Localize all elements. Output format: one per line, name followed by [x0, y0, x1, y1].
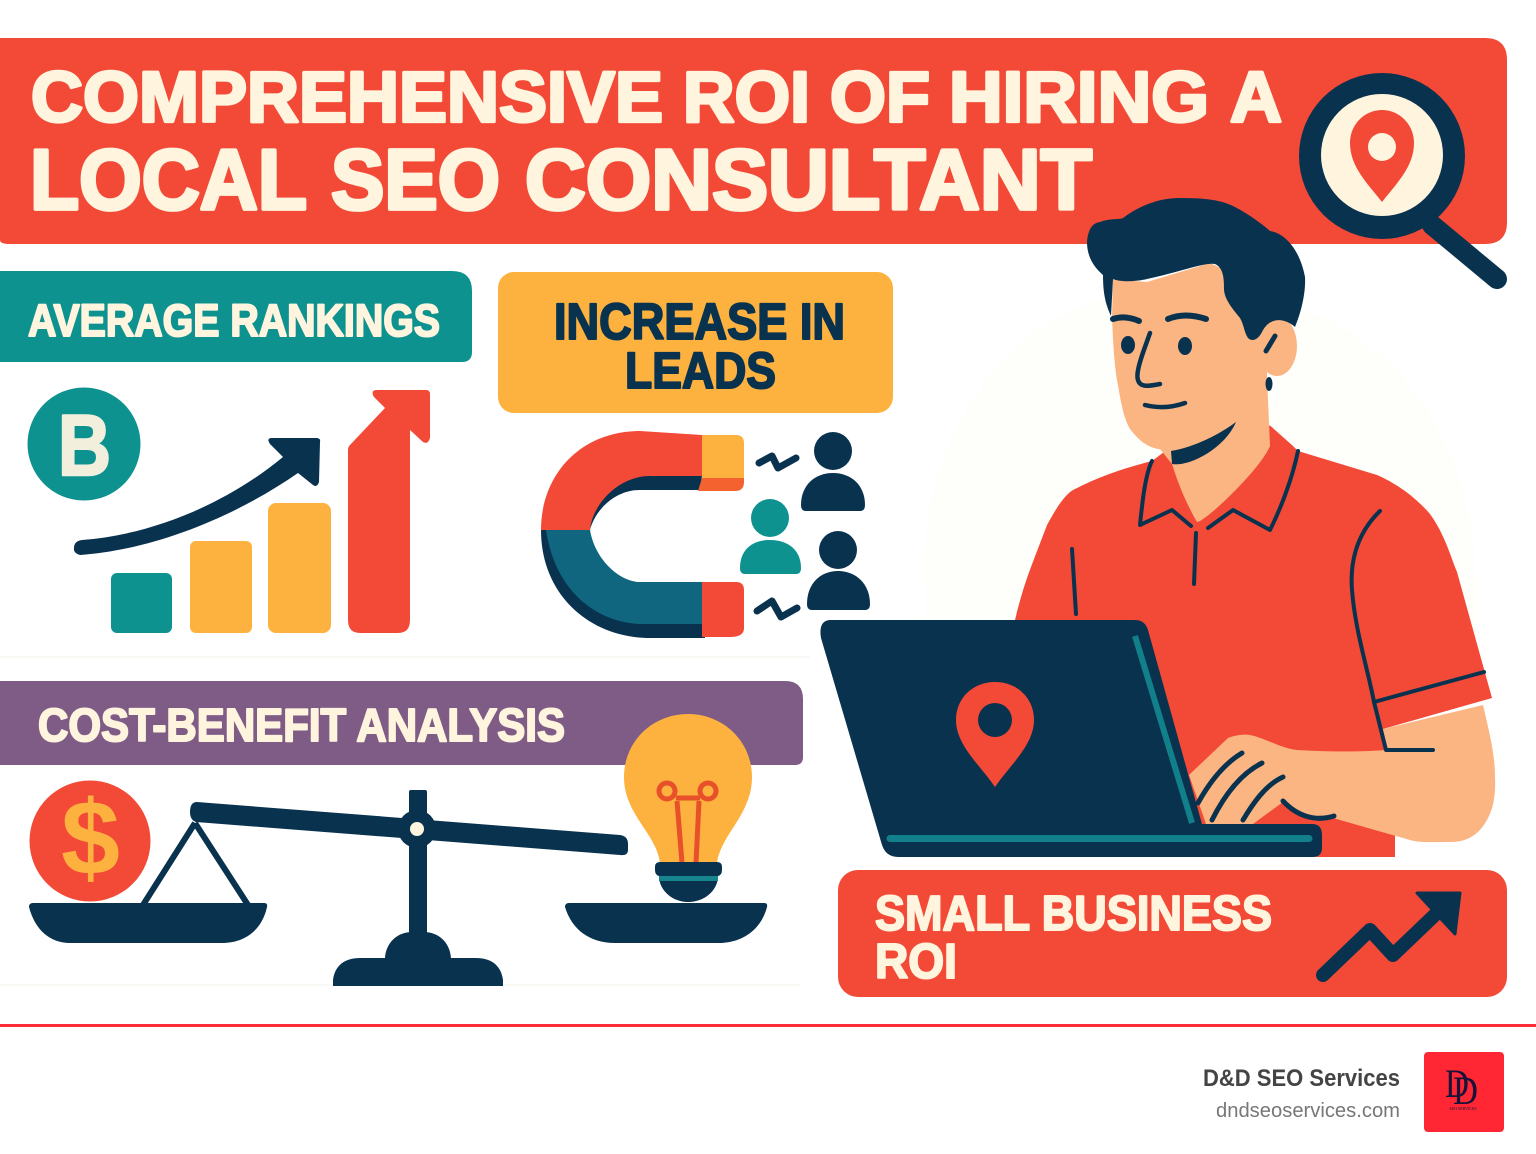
brand website: dndseoservices.com — [1216, 1100, 1400, 1122]
panel: cost-benefit analysis — [0, 681, 803, 986]
logo: SEO SERVICES — [1449, 1106, 1477, 1111]
title banner — [0, 38, 1507, 244]
heading: average rankings — [0, 271, 472, 362]
title: OF — [830, 58, 930, 138]
title: HIRING — [949, 58, 1209, 138]
heading: increase in leads — [498, 272, 893, 413]
bar chart with rising arrows — [74, 390, 430, 633]
icon: magnifying glass with map pin — [1299, 73, 1497, 279]
icon: B grade badge: B — [58, 398, 111, 494]
heading: cost-benefit analysis — [0, 681, 803, 765]
brand name: D&D SEO Services — [1203, 1065, 1400, 1092]
icon: horseshoe magnet — [541, 431, 744, 638]
heading: small business ROI: SMALL BUSINESS — [875, 887, 1272, 941]
shirt — [1015, 426, 1492, 857]
icon: growth arrow — [1323, 893, 1460, 975]
title: SEO — [331, 133, 500, 228]
ear — [1257, 316, 1297, 376]
title: LOCAL — [30, 133, 307, 228]
title: ROI — [683, 58, 810, 138]
illustration: consultant at laptop — [820, 198, 1495, 857]
icon: dollar coin: $ — [61, 779, 120, 897]
icon: B grade badge — [28, 388, 140, 500]
icon: dollar coin — [30, 779, 150, 902]
panel: increase in leads — [498, 272, 893, 638]
heading: increase in leads: INCREASE IN — [554, 293, 845, 350]
title — [30, 58, 1282, 228]
title: A — [1230, 58, 1282, 138]
title: COMPREHENSIVE — [31, 58, 663, 138]
heading: cost-benefit analysis: COST-BENEFIT ANALYSIS — [38, 699, 565, 751]
footer divider — [0, 1024, 1536, 1027]
face — [1112, 263, 1267, 449]
logo: D — [1453, 1068, 1478, 1113]
heading: increase in leads: LEADS — [625, 342, 776, 399]
logo — [1424, 1052, 1504, 1132]
panel: small business ROI — [838, 870, 1507, 997]
title: CONSULTANT — [525, 133, 1092, 228]
laptop — [820, 620, 1322, 857]
heading: average rankings: AVERAGE RANKINGS — [28, 295, 440, 346]
hair — [1087, 198, 1305, 340]
icon: attracted lead people — [740, 432, 870, 617]
footer branding — [1203, 1052, 1504, 1132]
logo: D — [1445, 1061, 1469, 1106]
chin shadow — [1171, 422, 1236, 464]
heading: small business ROI: ROI — [875, 935, 957, 989]
neck — [1160, 377, 1270, 522]
heading: small business ROI — [875, 887, 1272, 989]
icon: light bulb — [624, 714, 752, 902]
icon: balance scale — [29, 790, 767, 986]
facial features and shirt lines — [1072, 316, 1484, 820]
panel: average rankings — [0, 271, 472, 633]
arm and hand — [1189, 705, 1495, 842]
icon: laptop map pin — [956, 682, 1034, 787]
